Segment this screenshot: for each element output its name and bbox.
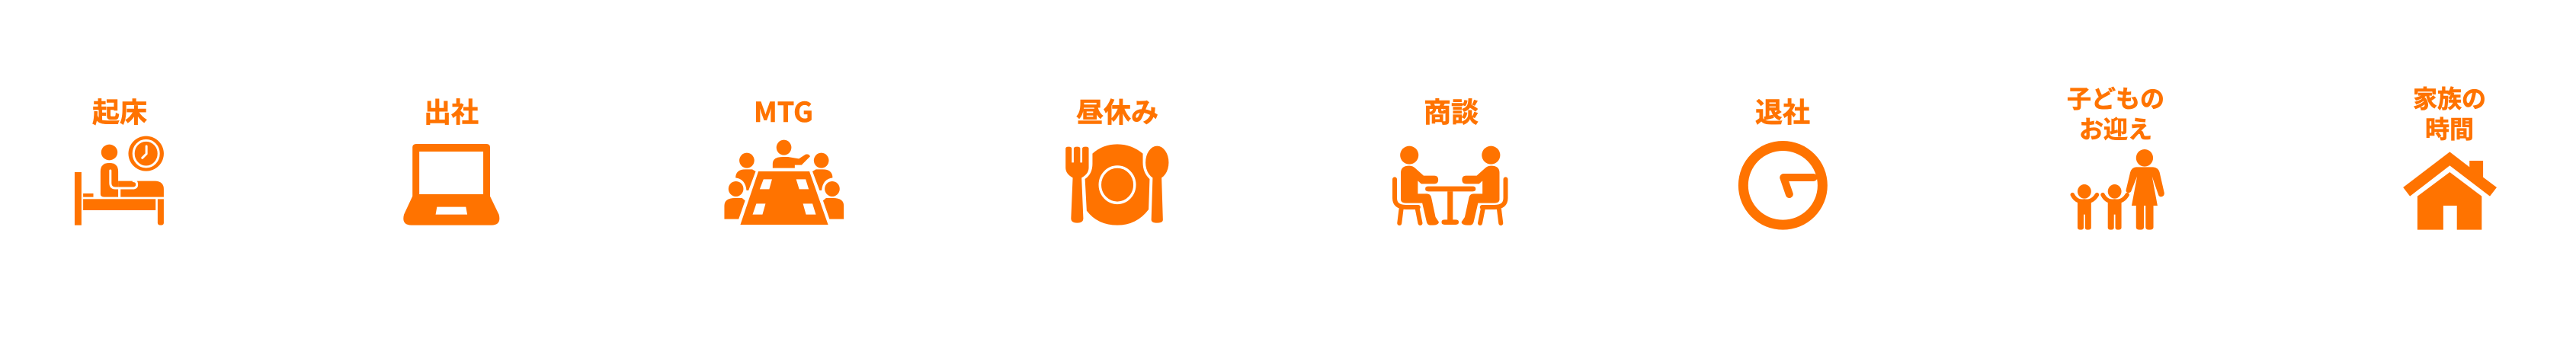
heading: wake up: 起床 [92,91,147,130]
heading line two: pick up children: お迎え [2079,110,2152,145]
heading: go to work: 出社 [424,91,479,130]
panel: go to work [403,91,499,225]
icon: mother with two children [2072,149,2164,230]
panel: leave work [1738,91,1828,230]
panel: business talk [1395,91,1506,225]
heading: meeting: MTG [754,91,813,130]
panel: pick up children [2067,80,2164,230]
icon: fork, plate and spoon [1065,144,1168,225]
icon: clock [1738,141,1828,230]
heading: leave work: 退社 [1755,91,1810,130]
panel: wake up [75,91,164,225]
icon: house [2403,152,2497,230]
icon: person sitting up in bed with clock [75,136,164,225]
heading: lunch break: 昼休み [1076,91,1158,130]
panel: meeting [724,91,844,225]
heading: pick up children: 子どもの [2067,80,2164,115]
icon: laptop [403,144,499,225]
heading: business talk: 商談 [1424,91,1479,130]
panel: family time [2403,80,2497,230]
heading: family time: 家族の [2413,80,2486,115]
heading line two: family time: 時間 [2425,110,2474,145]
icon: two people seated at a table [1395,146,1506,225]
icon: meeting table with five people [724,140,844,225]
panel: lunch break [1065,91,1168,225]
